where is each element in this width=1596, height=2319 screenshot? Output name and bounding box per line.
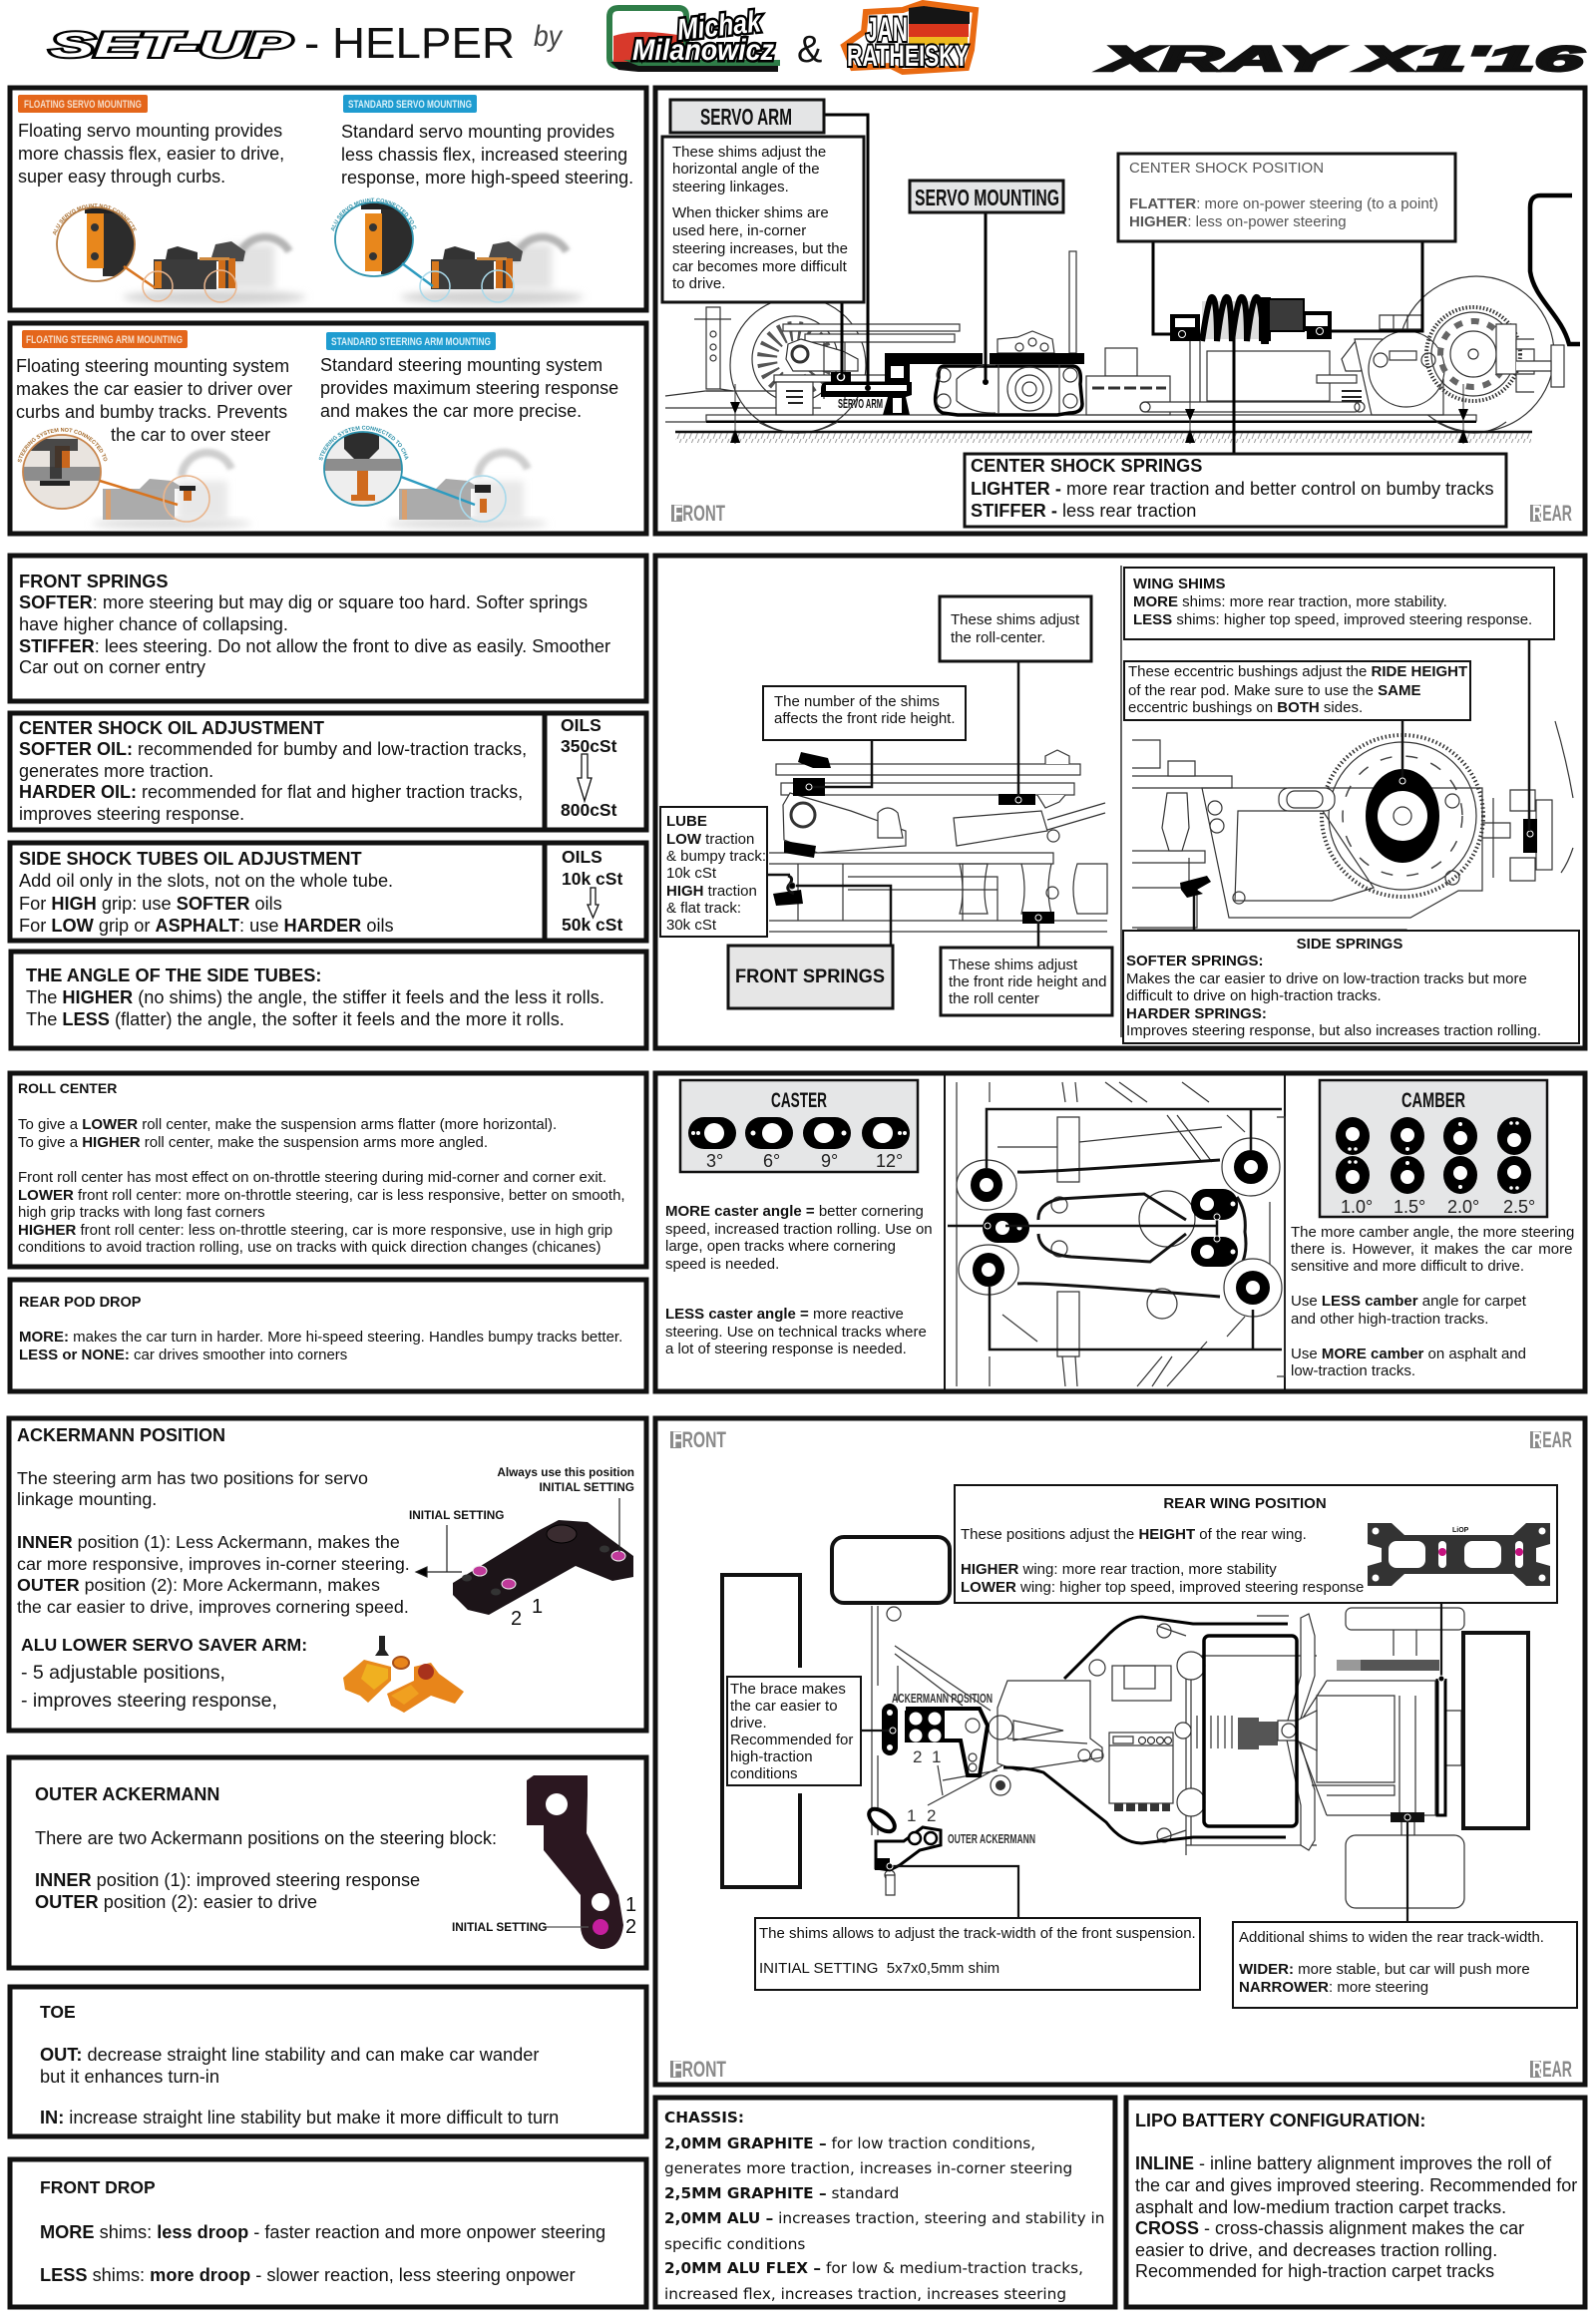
- text: caster explanation: MORE caster angle = better cornering: [665, 1203, 924, 1220]
- scale: side oils: [562, 847, 622, 935]
- callout: ride height shims: The number of the shims: [774, 693, 940, 710]
- image: steering arm: 1: [532, 1596, 543, 1618]
- label: always use this position: INITIAL SETTING: [540, 1480, 634, 1494]
- panel: roll center: ROLL CENTER: [18, 1080, 117, 1096]
- label: rear top: [1530, 1427, 1572, 1452]
- scale: side oils: OILS: [562, 847, 602, 867]
- callout: lube: [660, 807, 767, 937]
- text: camber explanation: low-traction tracks.: [1291, 1362, 1415, 1379]
- logo: Michak Milanowicz: Michak: [675, 5, 763, 47]
- callout: steering shims: used here, in-corner: [672, 222, 806, 239]
- callout: side springs: Makes the car easier to drive on low-traction tracks but more: [1126, 970, 1527, 987]
- callout: the brace: high-traction: [730, 1748, 813, 1765]
- ampersand: &: [797, 29, 822, 71]
- label: servo mounting: SERVO MOUNTING: [915, 185, 1059, 210]
- logo: Jan Ratheisky: RATHEISKY: [847, 40, 969, 73]
- panel: front springs: Car out on corner entry: [19, 657, 206, 677]
- panel: rear pod drop: MORE: makes the car turn in harder. More hi-speed steering. Handles bumpy tracks better.: [19, 1329, 622, 1346]
- text: caster explanation: speed, increased traction rolling. Use on: [665, 1221, 933, 1238]
- callout: front ride height and roll center: the front ride height and: [949, 973, 1106, 990]
- connector lines: [767, 639, 1529, 947]
- callout: rear wing position: HIGHER wing: more rear traction, more stability: [961, 1561, 1277, 1578]
- label: servo arm: SERVO ARM: [700, 104, 792, 130]
- callout: rear wing position: REAR WING POSITION: [1163, 1495, 1327, 1512]
- text: ackermann: OUTER position (2): More Ackermann, makes: [17, 1575, 380, 1595]
- panel: toe: TOE: [40, 2002, 76, 2022]
- text: standard servo: response, more high-speed steering.: [341, 168, 633, 188]
- panel: rear pod drop: LESS or NONE: car drives smoother into corners: [19, 1347, 347, 1363]
- logo: Michak Milanowicz: Milanowicz: [632, 34, 774, 67]
- label: ackermann numbers: 1: [932, 1747, 941, 1766]
- outline: rear tyre: [1463, 1633, 1528, 1828]
- callout: rear wing position: These positions adjust the HEIGHT of the rear wing.: [961, 1526, 1307, 1543]
- callout: wing shims: LESS shims: higher top speed, improved steering response.: [1133, 611, 1532, 628]
- text: outer ackermann: There are two Ackermann positions on the steering block:: [35, 1828, 497, 1848]
- connector lines: [861, 1603, 1444, 1922]
- panel: front springs: SOFTER: more steering but may dig or square too hard. Softer springs: [19, 592, 588, 612]
- chart: camber: 2.5°: [1503, 1197, 1535, 1217]
- text: caster explanation: large, open tracks where cornering: [665, 1238, 896, 1255]
- label: front: FRONT: [673, 501, 725, 526]
- label: standard steering arm mounting: [326, 332, 496, 350]
- panel: outer ackermann: [9, 1757, 646, 1968]
- text: caster explanation: steering. Use on technical tracks where: [665, 1324, 927, 1341]
- callout: center shock position: CENTER SHOCK POSITION: [1129, 160, 1324, 177]
- callout: lube: LOW traction: [666, 831, 754, 848]
- panel: front springs: [10, 556, 646, 701]
- highlight: servo arm: SERVO ARM: [838, 396, 883, 411]
- label: servo mounting: [910, 181, 1063, 212]
- callout: wing shims: [1124, 568, 1554, 639]
- panel: roll center: [10, 1073, 646, 1267]
- text: center shock oil: generates more traction.: [19, 761, 213, 781]
- scale: center oils: 800cSt: [561, 800, 617, 820]
- label: standard servo mounting: [343, 95, 477, 113]
- panel: lipo battery configuration: easier to drive, and decreases traction rolling.: [1135, 2240, 1497, 2260]
- callout: ride height shims: affects the front ride height.: [774, 710, 956, 727]
- panel: angle of side tubes: The LESS (flatter) the angle, the softer it feels and the more it rolls.: [26, 1009, 565, 1029]
- label: standard steering arm mounting: STANDARD STEERING ARM MOUNTING: [331, 336, 491, 348]
- panel: toe: OUT: decrease straight line stability and can make car wander: [40, 2045, 539, 2065]
- panel: roll center: To give a LOWER roll center, make the suspension arms flatter (more horizontal).: [18, 1116, 557, 1133]
- panel: chassis: 2,5MM GRAPHITE – standard: [664, 2184, 899, 2202]
- illustration: floating steering mount: [18, 427, 248, 532]
- logo: Michak Milanowicz: [609, 5, 780, 72]
- callout: rear wing position: [955, 1485, 1557, 1603]
- illustration: floating servo mount: [52, 203, 305, 309]
- panel: chassis: 2,0MM ALU – increases traction, steering and stability in: [664, 2209, 1104, 2227]
- header: [50, 3, 1584, 79]
- label: floating servo mounting: FLOATING SERVO MOUNTING: [24, 99, 142, 111]
- label: front springs: FRONT SPRINGS: [735, 966, 885, 987]
- panel: steering arm mounting: [8, 321, 648, 537]
- title: set-up helper: [50, 19, 564, 68]
- label: standard servo mounting: STANDARD SERVO MOUNTING: [348, 99, 472, 111]
- text: side tubes oil: For LOW grip or ASPHALT: use HARDER oils: [19, 916, 394, 936]
- panel: chassis: generates more traction, increases in-corner steering: [664, 2159, 1072, 2177]
- callout: side springs: difficult to drive on high-traction tracks.: [1126, 987, 1382, 1004]
- text: side tubes oil: For HIGH grip: use SOFTER oils: [19, 894, 282, 914]
- label: servo arm: [670, 100, 824, 133]
- callout: steering shims: These shims adjust the: [672, 144, 826, 161]
- callout: side springs: [1123, 931, 1579, 1043]
- panel: roll center: HIGHER front roll center: less on-throttle steering, car is more responsive, use in high grip: [18, 1222, 612, 1239]
- text: camber explanation: [1291, 1224, 1574, 1379]
- drawing: rear pod: [1132, 721, 1573, 938]
- illustration: standard servo mount: ALU SERVO MOUNT CONNECTED TO CHASSIS: [331, 197, 417, 231]
- text: standard steering: Standard steering mounting system: [320, 355, 602, 375]
- panel: servo mounting: [8, 86, 648, 313]
- panel: toe: [10, 1987, 646, 2136]
- label: front bottom: FRONT: [672, 2057, 726, 2082]
- title: set-up helper: SET-UP: [50, 26, 292, 65]
- panel: center shock oil: [10, 713, 646, 830]
- callout: steering shims: horizontal angle of the: [672, 161, 820, 178]
- panel: chassis: specific conditions: [664, 2235, 805, 2253]
- text: ackermann: the car easier to drive, improves cornering speed.: [17, 1597, 409, 1617]
- label: rear top: REAR: [1532, 1427, 1572, 1452]
- panel: front springs: have higher chance of collapsing.: [19, 614, 288, 634]
- callout: side springs: SIDE SPRINGS: [1297, 936, 1402, 953]
- callout: rear track-width shims: Additional shims to widen the rear track-width.: [1239, 1929, 1544, 1946]
- panel: lipo battery configuration: [1126, 2098, 1585, 2307]
- panel: side shock tubes oil: [10, 843, 646, 941]
- label: front springs: [728, 946, 893, 1008]
- callout: ride height shims: [763, 686, 966, 740]
- text: alu lower servo saver arm: - 5 adjustable positions,: [21, 1662, 225, 1684]
- panel: ackermann position: [9, 1418, 646, 1731]
- panel: lipo battery configuration: asphalt and low-medium traction carpet tracks.: [1135, 2197, 1506, 2217]
- label: rear: REAR: [1532, 501, 1572, 526]
- callout: steering shims: car becomes more difficult: [672, 258, 848, 275]
- chart: caster: 12°: [876, 1151, 903, 1171]
- callout: front track-width shims: The shims allows to adjust the track-width of the front suspension.: [759, 1925, 1196, 1942]
- callout: the brace: The brace makes: [730, 1681, 846, 1698]
- callout: front ride height and roll center: These shims adjust: [949, 957, 1078, 973]
- panel: chassis: [655, 2098, 1115, 2307]
- drawing: car top view: [872, 1606, 1464, 1908]
- callout: front track-width shims: INITIAL SETTING 5x7x0,5mm shim: [759, 1960, 999, 1977]
- text: ackermann: The steering arm has two positions for servo: [17, 1468, 368, 1488]
- label: rear: [1530, 501, 1572, 526]
- chart: caster: CASTER: [771, 1089, 827, 1112]
- text: outer ackermann: OUTER position (2): easier to drive: [35, 1892, 317, 1912]
- scale: side oils: 10k cSt: [562, 869, 622, 889]
- callout: steering shims: When thicker shims are: [672, 204, 829, 221]
- panel: chassis: CHASSIS:: [664, 2109, 744, 2126]
- text: floating servo: super easy through curbs.: [18, 167, 225, 187]
- panel: chassis: 2,0MM GRAPHITE – for low traction conditions,: [664, 2134, 1035, 2152]
- callout: front ride height and roll center: [941, 948, 1112, 1015]
- panel: toe: but it enhances turn-in: [40, 2067, 219, 2087]
- image: steering arm: [416, 1498, 633, 1630]
- text: ackermann: ACKERMANN POSITION: [17, 1425, 225, 1445]
- panel: chassis: 2,0MM ALU FLEX – for low & medium-traction tracks,: [664, 2259, 1083, 2277]
- outline: front wing: [832, 1537, 950, 1603]
- label: outer ackermann: OUTER ACKERMANN: [948, 1831, 1035, 1846]
- chart: camber: CAMBER: [1401, 1089, 1465, 1112]
- image: carbon wing mount: [1368, 1523, 1550, 1586]
- title: XRAY X1'16: XRAY X1'16: [1097, 40, 1584, 79]
- callout: eccentric bushings: These eccentric bushings adjust the RIDE HEIGHT: [1128, 663, 1467, 680]
- callout: the brace: [727, 1677, 861, 1785]
- callout: rear track-width shims: [1233, 1922, 1577, 2008]
- callout: center shock springs: [965, 454, 1506, 527]
- scale: center oils: OILS: [561, 715, 601, 735]
- illustration: standard steering mount: STEERING SYSTEM CONNECTED TO CHASSIS: [319, 425, 409, 461]
- panel: side view of car: [655, 88, 1585, 534]
- highlight: servo arm: [821, 353, 1084, 415]
- text: camber explanation: The more camber angle, the more steering: [1291, 1224, 1574, 1241]
- callout: wing shims: MORE shims: more rear traction, more stability.: [1133, 593, 1447, 610]
- chart: caster: 6°: [763, 1151, 780, 1171]
- chart: caster: 9°: [821, 1151, 838, 1171]
- callout: center shock position: [1118, 154, 1455, 241]
- callout: roll-center shims: the roll-center.: [951, 629, 1045, 646]
- text: outer ackermann: INNER position (1): improved steering response: [35, 1870, 420, 1890]
- chart: camber: 1.5°: [1394, 1197, 1425, 1217]
- callout: front track-width shims: [755, 1918, 1200, 1990]
- highlight: ackermann plate: [865, 1704, 1424, 1870]
- text: floating steering: the car to over steer: [111, 425, 270, 445]
- panel: front springs: STIFFER: lees steering. Do not allow the front to dive as easily. Smoother: [19, 636, 610, 656]
- callout: side springs: Improves steering response, but also increases traction rolling.: [1126, 1022, 1541, 1039]
- label: ackermann numbers: 1: [907, 1806, 916, 1825]
- chart: caster: [680, 1080, 918, 1172]
- label: floating steering arm mounting: FLOATING STEERING ARM MOUNTING: [26, 334, 183, 346]
- label: rear bottom: [1530, 2057, 1572, 2082]
- text: ackermann: INNER position (1): Less Ackermann, makes the: [17, 1532, 400, 1552]
- panel: toe: IN: increase straight line stability but make it more difficult to turn: [40, 2108, 559, 2127]
- text: camber explanation: there is. However, it makes the car more: [1291, 1241, 1572, 1258]
- callout: steering shims: [662, 137, 864, 302]
- scale: side oils: 50k cSt: [562, 915, 622, 935]
- illustration: standard steering mount: [319, 425, 545, 532]
- image: steering arm: 2: [511, 1608, 522, 1630]
- text: camber explanation: sensitive and more difficult to drive.: [1291, 1258, 1524, 1275]
- callout: lube: 10k cSt: [666, 865, 717, 882]
- text: floating steering: Floating steering mounting system: [16, 356, 289, 376]
- callout: lube: HIGH traction: [666, 883, 757, 900]
- callout: the brace: drive.: [730, 1715, 767, 1732]
- callout: rear track-width shims: NARROWER: more steering: [1239, 1979, 1428, 1996]
- callout: wing shims: WING SHIMS: [1133, 576, 1225, 592]
- text: caster explanation: LESS caster angle = more reactive: [665, 1306, 904, 1323]
- panel: roll center: Front roll center has most effect on on-throttle steering during mid-corner and corner exit.: [18, 1169, 606, 1186]
- text: standard servo: less chassis flex, increased steering: [341, 145, 627, 165]
- panel: roll center: high grip tracks with long fast corners: [18, 1204, 265, 1221]
- panel: lipo battery configuration: LIPO BATTERY CONFIGURATION:: [1135, 2111, 1425, 2130]
- panel: lipo battery configuration: CROSS - cross-chassis alignment makes the car: [1135, 2218, 1524, 2238]
- text: ackermann: car more responsive, improves in-corner steering.: [17, 1554, 410, 1574]
- text: side tubes oil: SIDE SHOCK TUBES OIL ADJUSTMENT: [19, 849, 362, 869]
- text: camber explanation: Use MORE camber on asphalt and: [1291, 1346, 1526, 1362]
- callout: side springs: HARDER SPRINGS:: [1126, 1005, 1267, 1022]
- label: initial setting: INITIAL SETTING: [409, 1508, 504, 1522]
- highlight: battery and chassis outline: [1003, 1617, 1445, 1843]
- highlight: center shock: [1170, 297, 1332, 341]
- text: alu lower servo saver arm: - improves steering response,: [21, 1690, 277, 1712]
- text: camber explanation: Use LESS camber angle for carpet: [1291, 1293, 1526, 1310]
- callout: lube: 30k cSt: [666, 917, 717, 934]
- image: steering block: [527, 1775, 636, 1949]
- panel: front drop: FRONT DROP: [40, 2177, 156, 2197]
- callout: center shock position: FLATTER: more on-power steering (to a point): [1129, 195, 1438, 212]
- panel: angle of side tubes: [11, 952, 646, 1048]
- text: caster explanation: speed is needed.: [665, 1256, 779, 1273]
- text: standard steering: and makes the car more precise.: [320, 401, 582, 421]
- panel: chassis: increased flex, increases traction, increases steering: [664, 2285, 1066, 2303]
- image: orange servo saver parts: [343, 1636, 464, 1713]
- panel: suspension detail: [655, 556, 1585, 1048]
- panel: roll center: conditions to avoid traction rolling, use on tracks with quick direction changes (chicanes): [18, 1239, 600, 1256]
- panel: top view of car: [655, 1418, 1585, 2085]
- text: standard steering: provides maximum steering response: [320, 378, 618, 398]
- illustration: floating steering mount: STEERING SYSTEM NOT CONNECTED TO CHASSIS: [18, 427, 108, 463]
- text: center shock oil: HARDER OIL: recommended for flat and higher traction tracks,: [19, 782, 523, 802]
- panel: lipo battery configuration: Recommended for high-traction carpet tracks: [1135, 2261, 1494, 2281]
- drawing: front suspension: [769, 750, 1107, 932]
- text: center shock oil: improves steering response.: [19, 804, 244, 824]
- title: set-up helper: by: [534, 20, 564, 53]
- text: ackermann: linkage mounting.: [17, 1489, 157, 1509]
- illustration: standard servo mount: [331, 197, 583, 309]
- callout: rear wing position: LOWER wing: higher top speed, improved steering response: [961, 1579, 1364, 1596]
- callout: rear track-width shims: WIDER: more stable, but car will push more: [1239, 1961, 1530, 1978]
- image: carbon wing mount: LiOP: [1452, 1527, 1469, 1534]
- label: always use this position: Always use this position: [497, 1465, 634, 1479]
- panel: angle of side tubes: THE ANGLE OF THE SIDE TUBES:: [26, 966, 321, 985]
- callout: center shock position: HIGHER: less on-power steering: [1129, 213, 1347, 230]
- callout: lube: & flat track:: [666, 900, 741, 917]
- callout: front ride height and roll center: the roll center: [949, 990, 1039, 1007]
- callout: eccentric bushings: of the rear pod. Make sure to use the SAME: [1128, 682, 1420, 699]
- callout: side springs: SOFTER SPRINGS:: [1126, 953, 1264, 969]
- connector lines: [824, 115, 1422, 454]
- panel: roll center: LOWER front roll center: more on-throttle steering, car is less responsive, better on smooth,: [18, 1187, 625, 1204]
- callout: steering shims: to drive.: [672, 275, 725, 292]
- panel: front drop: MORE shims: less droop - faster reaction and more onpower steering: [40, 2222, 605, 2242]
- image: steering block: 2: [625, 1916, 636, 1938]
- text: alu lower servo saver arm: ALU LOWER SERVO SAVER ARM:: [21, 1635, 307, 1655]
- text: outer ackermann: OUTER ACKERMANN: [35, 1784, 219, 1804]
- panel: angle of side tubes: The HIGHER (no shims) the angle, the stiffer it feels and the less it rolls.: [26, 987, 604, 1007]
- callout: center shock springs: STIFFER - less rear traction: [971, 501, 1196, 521]
- label: front top: FRONT: [672, 1427, 726, 1452]
- text: floating servo: more chassis flex, easier to drive,: [18, 144, 284, 164]
- text: standard servo: Standard servo mounting provides: [341, 122, 614, 142]
- text: center shock oil: CENTER SHOCK OIL ADJUSTMENT: [19, 718, 324, 738]
- text: camber explanation: and other high-traction tracks.: [1291, 1311, 1488, 1328]
- panel: lipo battery configuration: the car and gives improved steering. Recommended for: [1135, 2175, 1577, 2195]
- logo: Jan Ratheisky: [844, 3, 976, 73]
- panel: roll center: To give a HIGHER roll center, make the suspension arms more angled.: [18, 1134, 488, 1151]
- drawing: bulkhead top view: [948, 1082, 1285, 1386]
- label: rear bottom: REAR: [1532, 2057, 1572, 2082]
- image: steering block: 1: [625, 1894, 636, 1916]
- label: ackermann numbers: 2: [913, 1747, 922, 1766]
- callout: lube: LUBE: [666, 813, 707, 830]
- text: center shock oil: SOFTER OIL: recommended for bumby and low-traction tracks,: [19, 739, 527, 759]
- callout: lube: & bumpy track:: [666, 848, 766, 865]
- outline: front tyre: [722, 1575, 800, 1887]
- text: floating steering: curbs and bumby tracks. Prevents: [16, 402, 287, 422]
- scale: center oils: [561, 715, 617, 820]
- panel: front springs: FRONT SPRINGS: [19, 572, 169, 591]
- chart: camber: [1320, 1080, 1547, 1217]
- callout: roll-center shims: [940, 596, 1091, 661]
- text: floating steering: makes the car easier to driver over: [16, 379, 292, 399]
- panel: front drop: LESS shims: more droop - slower reaction, less steering onpower: [40, 2265, 576, 2285]
- text: floating servo: Floating servo mounting provides: [18, 121, 282, 141]
- scale: center oils: 350cSt: [561, 736, 617, 756]
- callout: eccentric bushings: [1124, 661, 1470, 720]
- text: caster explanation: a lot of steering response is needed.: [665, 1341, 907, 1357]
- panel: front drop: [10, 2159, 646, 2307]
- text: side tubes oil: Add oil only in the slots, not on the whole tube.: [19, 871, 393, 891]
- callout: eccentric bushings: eccentric bushings on BOTH sides.: [1128, 699, 1363, 716]
- callout: steering shims: steering increases, but the: [672, 240, 848, 257]
- panel: rear pod drop: [10, 1280, 646, 1391]
- highlight: servo: [936, 365, 1082, 415]
- callout: the brace: the car easier to: [730, 1698, 838, 1715]
- logo: Jan Ratheisky: JAN: [866, 11, 908, 49]
- callout: center shock springs: LIGHTER - more rear traction and better control on bumby tracks: [971, 479, 1494, 499]
- callout: roll-center shims: These shims adjust: [951, 611, 1080, 628]
- label: floating steering arm mounting: [22, 330, 188, 348]
- title: set-up helper: - HELPER: [304, 19, 515, 68]
- callout: the brace: conditions: [730, 1765, 798, 1782]
- callout: center shock springs: CENTER SHOCK SPRINGS: [971, 456, 1202, 476]
- label: floating servo mounting: [18, 95, 148, 113]
- callout: the brace: Recommended for: [730, 1732, 853, 1748]
- drawing: car side view: [665, 195, 1580, 444]
- label: initial setting: INITIAL SETTING: [452, 1920, 547, 1934]
- panel: rear pod drop: REAR POD DROP: [19, 1295, 142, 1311]
- panel: caster, bulkhead, camber: [655, 1073, 1585, 1391]
- chart: camber: 1.0°: [1341, 1197, 1373, 1217]
- panel: lipo battery configuration: INLINE - inline battery alignment improves the roll of: [1135, 2153, 1551, 2173]
- label: ackermann numbers: 2: [927, 1806, 936, 1825]
- callout: steering shims: steering linkages.: [672, 179, 789, 195]
- chart: camber: 2.0°: [1447, 1197, 1479, 1217]
- chart: caster: 3°: [706, 1151, 723, 1171]
- label: ackermann position: ACKERMANN POSITION: [892, 1691, 993, 1706]
